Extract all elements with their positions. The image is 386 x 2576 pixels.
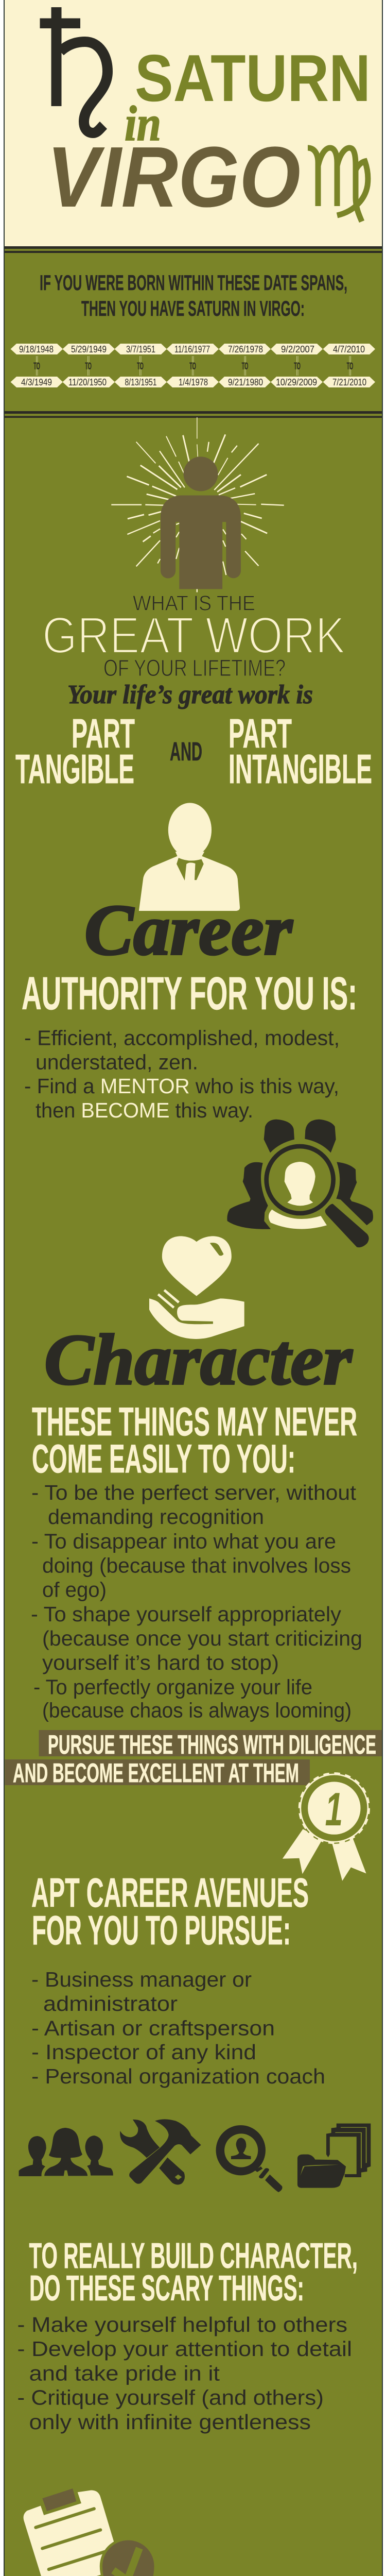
text: authority list: - Efficient, accomplished, modest, — [24, 1026, 340, 1050]
icon: businessman — [139, 803, 240, 911]
icons: career avenues row — [19, 2119, 371, 2192]
text: difficulties list: (because once you start criticizing — [42, 1626, 362, 1650]
end dates: 9/21/1980 — [228, 377, 263, 387]
start dates: 3/7/1951 — [126, 344, 155, 354]
start dates: 11/16/1977 — [174, 344, 210, 354]
icon: clipboard check — [24, 2488, 156, 2576]
panel: title — [5, 0, 382, 246]
text: career list — [31, 1968, 325, 2088]
start dates — [19, 344, 365, 354]
text: difficulties list: demanding recognition — [48, 1505, 264, 1529]
end dates — [21, 377, 366, 387]
icon: first place ribbon: 1 — [325, 1784, 343, 1836]
icon: inspector — [216, 2125, 283, 2192]
TO labels: TO — [242, 361, 248, 372]
icon: heart in hand — [149, 1236, 244, 1339]
TO labels: TO — [189, 361, 196, 372]
text: difficulties list: yourself it’s hard to stop) — [42, 1651, 279, 1674]
start dates: 5/29/1949 — [71, 344, 107, 354]
icon: mentor search — [227, 1120, 373, 1247]
text: authority list: - Find a MENTOR who is this way, — [24, 1074, 339, 1098]
divider: title and dates — [5, 246, 382, 414]
sun rays — [111, 417, 284, 592]
text: career list: administrator — [43, 1992, 178, 2015]
start dates: 7/26/1978 — [228, 344, 263, 354]
label: part tangible — [15, 710, 135, 792]
text: scary things list — [17, 2313, 352, 2434]
text: difficulties list: - To be the perfect server, without — [31, 1481, 357, 1504]
icon: tools — [120, 2119, 201, 2184]
end dates: 10/29/2009 — [276, 377, 317, 387]
text: scary things list: only with infinite gentleness — [29, 2410, 311, 2434]
date hexagons — [10, 344, 375, 387]
end dates: 8/13/1951 — [125, 377, 156, 387]
icon: Saturn glyph — [40, 7, 108, 133]
heading: of your lifetime: OF YOUR LIFETIME? — [103, 655, 286, 681]
divider: dates and main panel — [5, 411, 382, 418]
panel: date spans: TO — [347, 361, 353, 372]
text: scary things list: - Critique yourself (and others) — [17, 2385, 324, 2409]
start dates: 4/7/2010 — [333, 344, 365, 354]
text: career list: - Inspector of any kind — [31, 2040, 256, 2064]
label: and: AND — [170, 737, 202, 766]
title word: VIRGO: VIRGO — [47, 129, 301, 225]
text: difficulties list: - To disappear into what you are — [31, 1529, 336, 1553]
end dates: 11/20/1950 — [68, 377, 107, 387]
text: difficulties list — [31, 1481, 362, 1722]
TO labels: TO — [85, 361, 92, 372]
icon: team — [19, 2128, 113, 2176]
title word: in: in — [125, 96, 161, 151]
TO labels: TO — [137, 361, 144, 372]
text: authority list: then BECOME this way. — [36, 1098, 253, 1122]
end dates: 4/3/1949 — [21, 377, 52, 387]
text: career list: - Personal organization coach — [31, 2064, 325, 2088]
text: career list: - Artisan or craftsperson — [31, 2016, 275, 2040]
TO labels — [33, 361, 353, 372]
label: part intangible — [229, 710, 372, 792]
text: scary things list: and take pride in it — [29, 2362, 220, 2385]
heading: build character — [29, 2235, 358, 2308]
text: difficulties list: doing (because that involves loss — [42, 1554, 351, 1578]
heading: character: Character — [44, 1320, 353, 1400]
panel: date spans — [10, 270, 375, 387]
heading: career: Career — [84, 890, 293, 970]
TO labels: TO — [294, 361, 301, 372]
text: scary things list: - Make yourself helpful to others — [17, 2313, 347, 2336]
text: career list: - Business manager or — [31, 1968, 252, 1991]
icon: folder and papers — [297, 2124, 371, 2188]
heading: apt career avenues — [31, 1870, 309, 1953]
heading: great work: GREAT WORK — [42, 607, 345, 665]
icon: radiant person — [111, 417, 284, 592]
text: difficulties list: - To perfectly organize your life — [33, 1675, 312, 1699]
icon: Virgo glyph — [308, 148, 368, 222]
date connectors — [36, 356, 351, 376]
label: part tangible: PART — [72, 710, 135, 756]
text: difficulties list: (because chaos is always looming) — [42, 1698, 352, 1722]
start dates: 9/18/1948 — [19, 344, 54, 354]
person silhouette — [161, 456, 241, 589]
start dates: 9/2/2007 — [281, 344, 314, 354]
end dates: 1/4/1978 — [179, 377, 208, 387]
heading: what is the: WHAT IS THE — [133, 591, 255, 615]
TO labels: TO — [33, 361, 40, 372]
heading: these things — [32, 1399, 357, 1481]
text: scary things list: - Develop your attention to detail — [17, 2337, 352, 2361]
text: authority list — [24, 1026, 340, 1122]
icon: first place ribbon — [283, 1772, 370, 1881]
subheading: your life's great work is: Your life’s great work is — [67, 680, 313, 709]
text: difficulties list: - To shape yourself appropriately — [31, 1602, 341, 1626]
text: authority list: understated, zen. — [36, 1050, 198, 1074]
end dates: 7/21/2010 — [332, 377, 366, 387]
label: part intangible: PART — [229, 710, 292, 756]
label: part tangible: TANGIBLE — [15, 746, 134, 792]
text: difficulties list: of ego) — [42, 1578, 107, 1601]
